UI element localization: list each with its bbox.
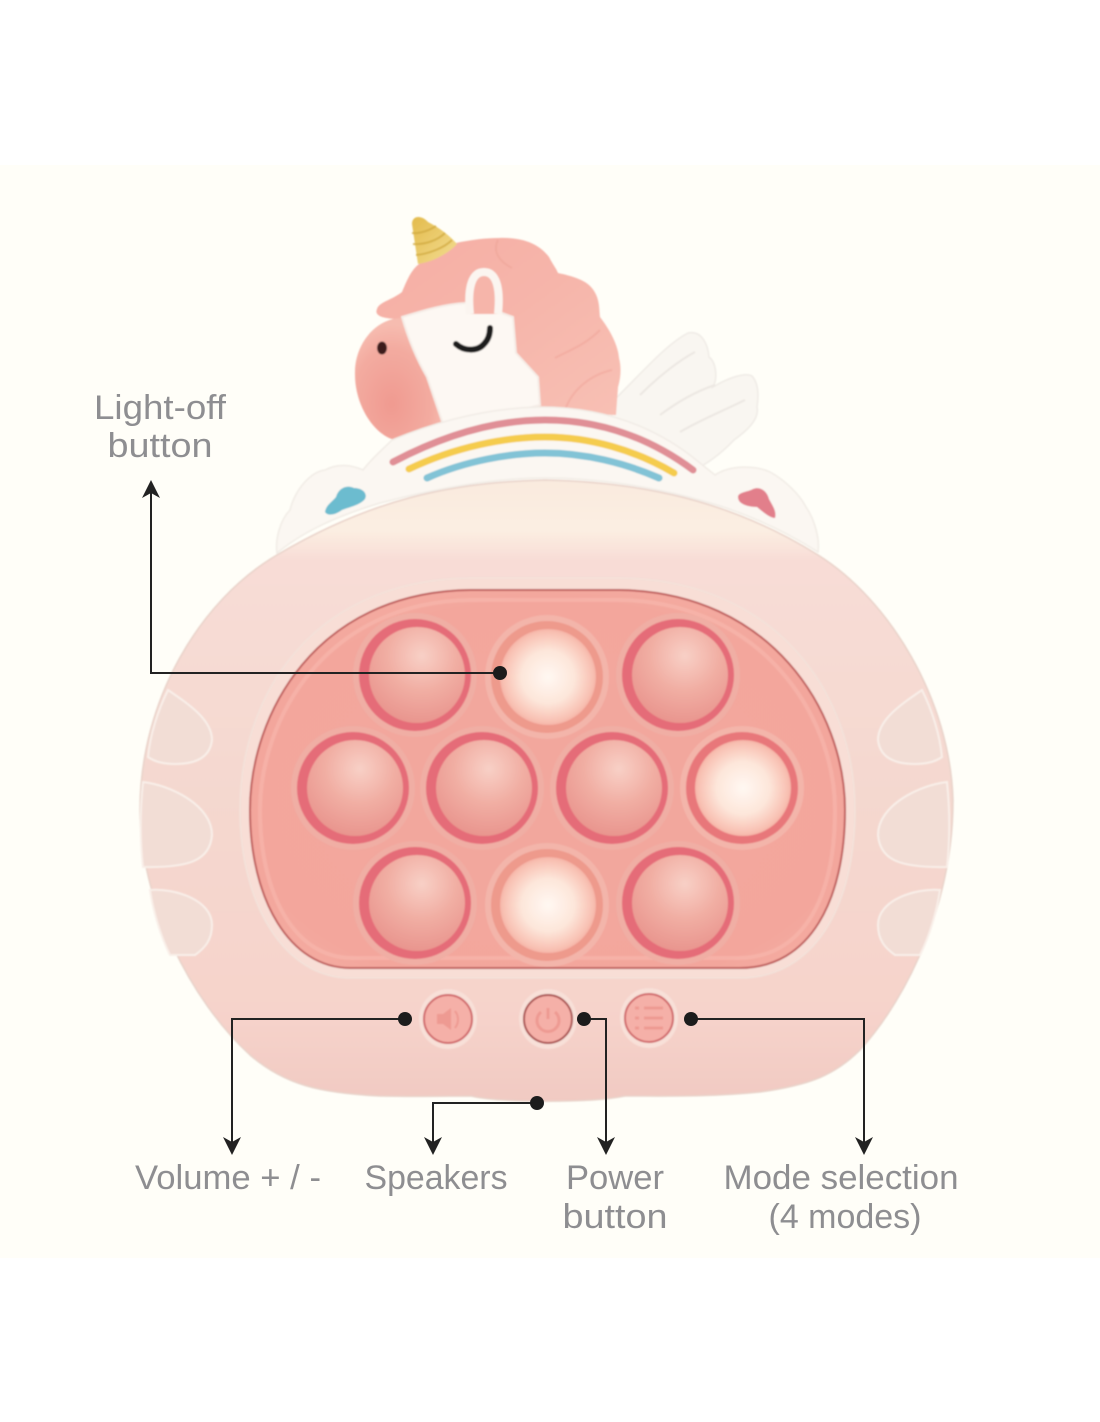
- callout: speakers: [424, 1096, 544, 1155]
- pop button row 3 center lit: [485, 843, 609, 967]
- callout: volume: [223, 1012, 412, 1155]
- power control button: [519, 989, 577, 1049]
- pop button row 1 left: [353, 613, 477, 737]
- rainbow pink stripe: [393, 420, 693, 470]
- pop button row 1 center lit: [485, 615, 609, 739]
- pop button row 3 right: [616, 841, 740, 965]
- pop button row 1 right: [616, 613, 740, 737]
- unicorn wing: [610, 333, 758, 472]
- label: mode selection: (4 modes): [768, 1198, 922, 1236]
- unicorn horn: [412, 217, 457, 264]
- pop button row 2 fourth lit: [680, 726, 804, 850]
- panel inner rim: [260, 600, 835, 958]
- label: power button: Power: [566, 1159, 664, 1197]
- label: power button: button: [562, 1198, 668, 1236]
- pop buttons: [291, 613, 804, 967]
- label: speakers: Speakers: [364, 1159, 508, 1197]
- unicorn mane highlights: [496, 240, 612, 410]
- blue cloud icon: [325, 487, 366, 515]
- pop button row 3 left: [353, 841, 477, 965]
- unicorn muzzle: [355, 318, 442, 441]
- button panel rim: [240, 578, 855, 978]
- unicorn mane: [376, 238, 621, 415]
- cream background panel: [0, 165, 1100, 1258]
- volume control button: [419, 989, 477, 1049]
- callout: power: [577, 1012, 615, 1155]
- callout: light-off button: [142, 480, 507, 680]
- label: light-off button: button: [108, 427, 212, 465]
- product: unicorn pop-it console: [140, 217, 953, 1101]
- callout: mode: [684, 1012, 873, 1155]
- rainbow band with clouds: [277, 407, 818, 553]
- pop button row 2 second: [420, 726, 544, 850]
- rainbow blue stripe: [427, 453, 659, 478]
- pop button row 2 third: [550, 726, 674, 850]
- pink cloud icon: [738, 488, 775, 518]
- unicorn closed eye: [456, 328, 490, 350]
- unicorn ear: [469, 272, 499, 314]
- label: light-off button: Light-off: [94, 389, 227, 427]
- label: volume: Volume + / -: [135, 1159, 321, 1197]
- unicorn white face: [402, 303, 540, 430]
- unicorn nostril: [377, 342, 387, 354]
- rainbow yellow stripe: [409, 437, 674, 473]
- label: mode selection: Mode selection: [724, 1159, 958, 1197]
- pop button row 2 first: [291, 726, 415, 850]
- left side ridges: [141, 690, 212, 955]
- console body: [140, 480, 953, 1101]
- right side ridges: [878, 690, 949, 955]
- button panel: [250, 590, 845, 968]
- mode control button: [620, 988, 678, 1048]
